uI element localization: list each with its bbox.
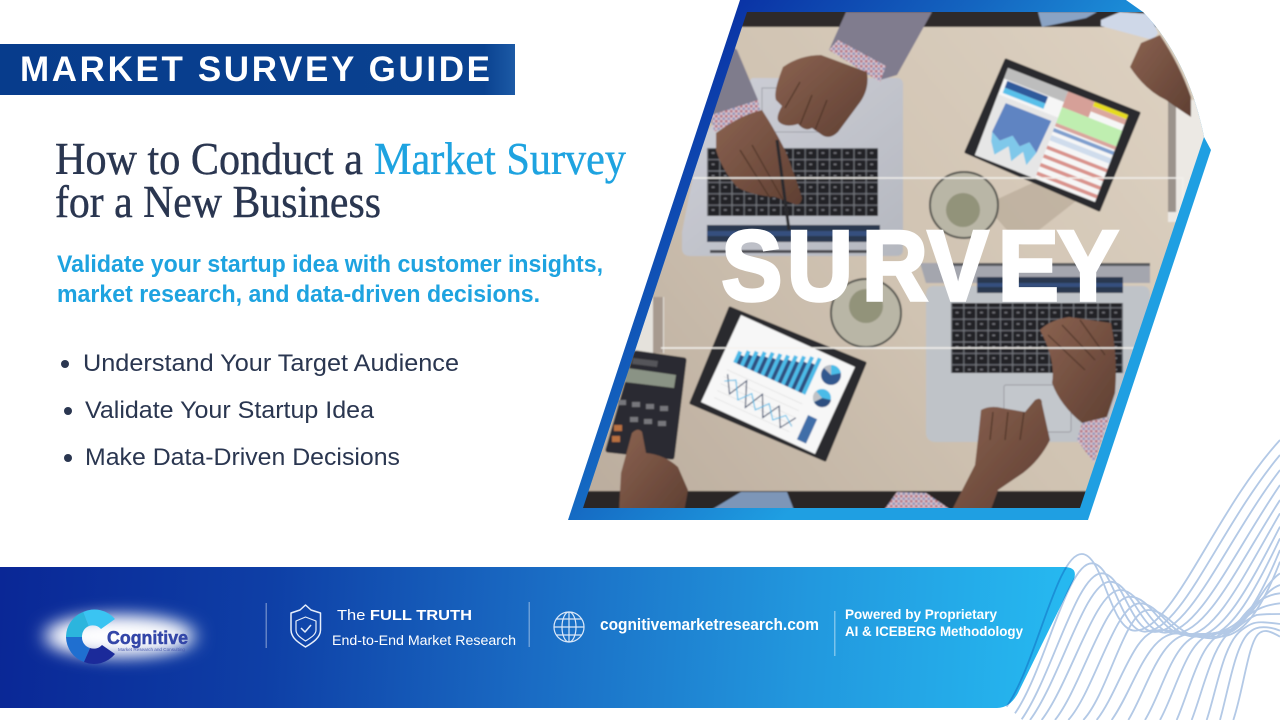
subtitle [57,251,603,308]
powered by text: Powered by Proprietary [845,606,997,622]
full truth text: End-to-End Market Research [332,633,516,648]
powered by text: AI & ICEBERG Methodology [845,623,1023,639]
laptop top [682,78,903,256]
tablet bottom [691,308,865,460]
logo: Market Research and Consulting [118,647,185,652]
website text: cognitivemarketresearch.com [600,616,819,634]
image panel: blue frame [568,0,1211,520]
bullet: data-driven decisions: Make Data-Driven Decisions [85,444,400,471]
full truth text [332,607,516,648]
full truth text: The FULL TRUTH [337,607,472,624]
top right hand and cuff [1038,12,1097,27]
calculator hand [619,430,688,512]
laptop bottom [920,263,1150,283]
right notebook [1168,100,1205,222]
title: for a New Business [55,177,381,227]
subtitle: market research, and data-driven decisions. [57,281,540,308]
header ribbon label: MARKET SURVEY GUIDE [20,50,490,89]
bottom centre hand [951,399,1050,512]
bullet list [61,350,459,471]
title: Market Survey [374,134,626,184]
image panel: desk photo [583,12,1204,508]
powered by text [845,606,1023,639]
left sleeve and hand [711,40,758,123]
calculator [608,353,684,457]
subtitle: Validate your startup idea with customer insights, [57,251,603,278]
thin white lines [692,176,1177,180]
icon: globe [554,612,584,642]
bullet: target audience: Understand Your Target Audience [83,350,459,377]
icon: shield [291,605,320,647]
glass bottom [831,279,901,347]
title [55,134,626,227]
footer banner [0,567,1075,708]
bottom right hand and cuff [1077,417,1109,463]
tablet top [966,60,1139,210]
SURVEY word: SURVEY [722,212,1118,322]
left notebook [630,297,664,353]
wave line graphic [1007,440,1280,720]
bullet: validate idea: Validate Your Startup Idea [85,397,375,424]
header ribbon [0,44,515,95]
glass top [930,172,998,238]
bottom sleeves [711,492,794,510]
title: How to Conduct a [55,134,363,184]
logo [44,609,196,664]
logo: Cognitive [107,628,188,648]
top sleeve and hand [829,12,932,80]
